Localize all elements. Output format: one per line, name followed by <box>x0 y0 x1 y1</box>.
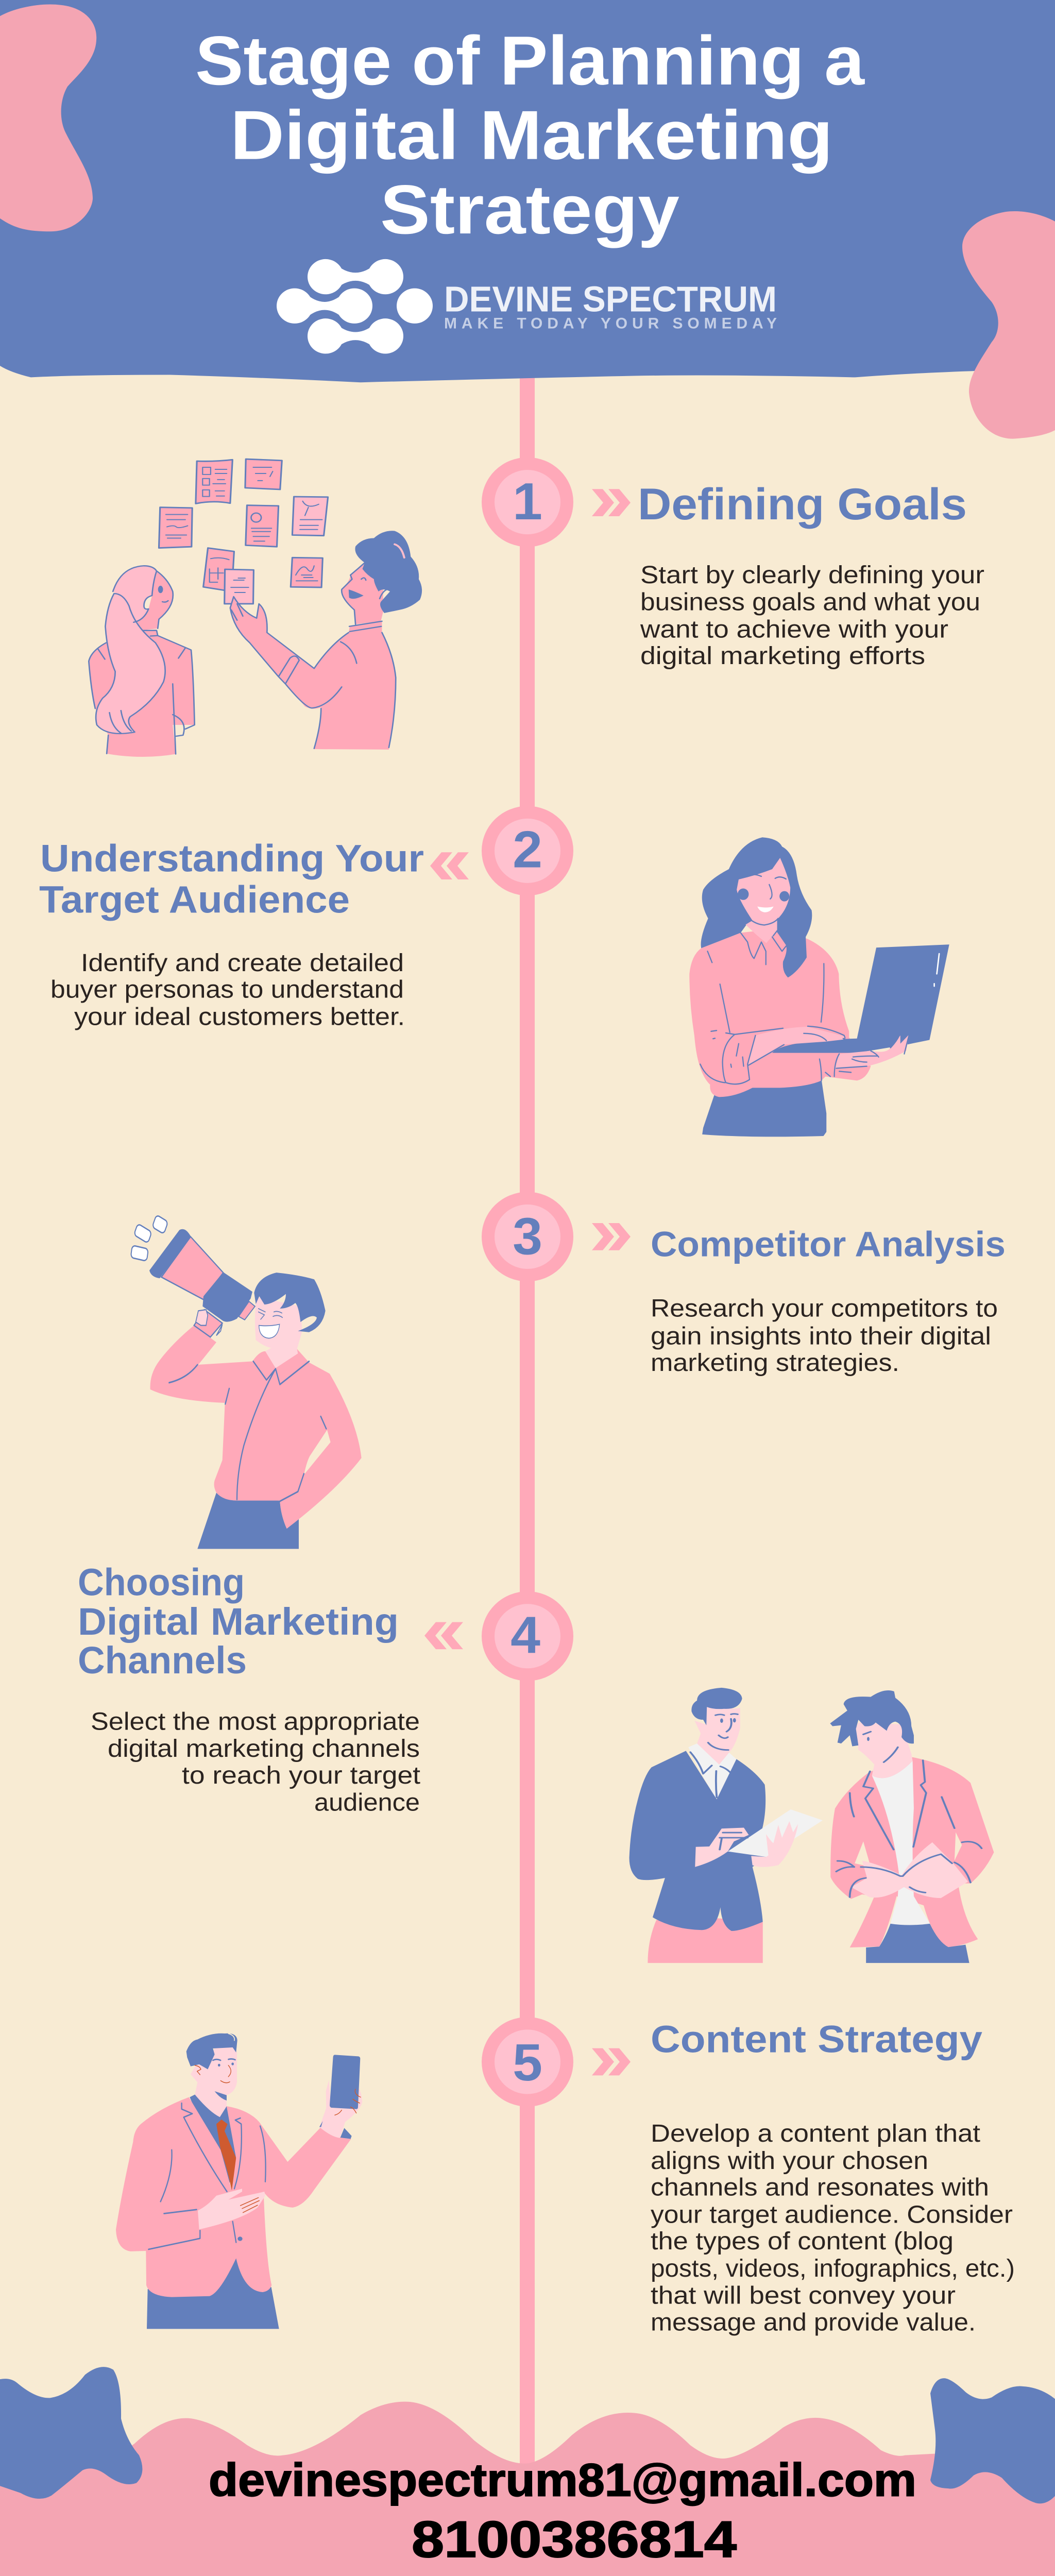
illustration: two colleagues talking <box>629 1688 994 1963</box>
hair <box>701 837 812 977</box>
face <box>737 858 790 923</box>
heading: Content Strategy <box>651 2018 982 2060</box>
number badge 1 <box>482 457 573 547</box>
body text: business goals and what you <box>640 588 980 616</box>
megaphone band <box>149 1229 191 1278</box>
header panel <box>0 0 1055 439</box>
logo mark: Devine Spectrum <box>277 259 433 354</box>
hands <box>748 1027 845 1065</box>
panel: step 2 understanding audience <box>39 806 949 1137</box>
shirt <box>190 2095 236 2188</box>
laughing mouth <box>259 1324 280 1338</box>
neck shadow <box>215 2091 227 2100</box>
megaphone body <box>202 1272 252 1322</box>
sticky notes <box>159 459 328 604</box>
illustration: man with megaphone <box>131 1215 362 1549</box>
sticky note scribbles <box>166 467 322 592</box>
hair <box>254 1273 326 1332</box>
left man head <box>694 1706 740 1766</box>
hair <box>186 2033 237 2070</box>
gap between torso and arm <box>304 1430 331 1475</box>
footer pink wave <box>0 2402 1055 2576</box>
man outlines and mouth <box>349 589 364 599</box>
illustration: man in blazer with phone <box>116 2033 362 2329</box>
right man t-shirt <box>872 1761 930 1925</box>
number badge 2: 2 <box>513 820 542 878</box>
sound bubbles <box>131 1215 168 1261</box>
arrow right <box>592 1223 631 1250</box>
number badge 2 <box>482 806 573 895</box>
eyes <box>218 2064 220 2066</box>
number badge 4: 4 <box>511 1605 540 1664</box>
writing hand <box>695 1827 748 1867</box>
lower hand <box>198 2189 265 2229</box>
arm gaps <box>855 1832 962 1867</box>
number badge 5: 5 <box>513 2033 542 2092</box>
decorative pink blob top left <box>0 5 96 231</box>
heading <box>39 837 424 921</box>
megaphone cone <box>161 1236 223 1299</box>
body text: Start by clearly defining your <box>640 561 984 589</box>
left man shirt <box>688 1743 737 1799</box>
man body <box>230 597 396 750</box>
body text: Research your competitors to <box>651 1295 998 1323</box>
woman outlines <box>89 566 195 754</box>
book and hands <box>851 1842 968 1898</box>
shirt <box>689 929 871 1097</box>
right man line details <box>836 1732 981 1897</box>
number badge 3: 3 <box>513 1207 542 1265</box>
phone <box>330 2055 360 2109</box>
right man trousers <box>866 1924 969 1963</box>
right man jacket <box>830 1757 994 1947</box>
trousers <box>147 2258 279 2329</box>
heading: Competitor Analysis <box>651 1224 1006 1264</box>
arrow right <box>592 489 631 516</box>
logo wordmark: MAKE TODAY YOUR SOMEDAY <box>444 315 777 332</box>
right blue blob <box>930 2378 1055 2503</box>
body text: your ideal customers better. <box>74 1003 405 1030</box>
right man eye and brow <box>733 1718 736 1722</box>
body text: aligns with your chosen <box>651 2147 928 2175</box>
left blue blob <box>0 2367 142 2499</box>
blazer line details <box>148 2059 266 2249</box>
fist <box>196 1310 223 1335</box>
heading: Defining Goals <box>638 480 967 529</box>
body text: marketing strategies. <box>651 1349 899 1377</box>
right man hair <box>830 1690 914 1747</box>
left man jacket <box>629 1751 769 1931</box>
tie <box>216 2120 236 2191</box>
woman body <box>89 630 195 757</box>
heading <box>78 1561 399 1682</box>
number badge 5 <box>482 2017 573 2107</box>
cheek right <box>779 891 789 902</box>
fingers on paper <box>766 1821 798 1856</box>
hair highlight <box>228 2033 234 2041</box>
number badge 3 <box>482 1192 573 1281</box>
body text: want to achieve with your <box>640 616 948 643</box>
left man skirt <box>648 1918 763 1963</box>
heading: Target Audience <box>39 878 350 921</box>
body text: Identify and create detailed <box>81 949 404 977</box>
body text: message and provide value. <box>651 2309 976 2336</box>
header blue wave background <box>0 0 1055 382</box>
title: Strategy <box>380 171 679 248</box>
cuff <box>319 2121 352 2139</box>
body text <box>651 2120 1015 2336</box>
megaphone rear <box>239 1301 255 1320</box>
body text: digital marketing efforts <box>640 642 925 670</box>
logo wordmark: DEVINE SPECTRUM <box>444 279 777 319</box>
number badge 1: 1 <box>513 472 542 531</box>
body text: digital marketing channels <box>108 1735 420 1762</box>
laptop <box>772 944 949 1053</box>
heading: Channels <box>78 1639 247 1682</box>
panel: step 1 defining goals <box>89 457 984 757</box>
body text: your target audience. Consider <box>651 2201 1013 2228</box>
skirt <box>702 1079 826 1137</box>
arrow left <box>430 852 469 879</box>
woman hair and head <box>132 571 173 631</box>
body text: Select the most appropriate <box>91 1708 420 1735</box>
phone hand <box>319 2080 362 2138</box>
left man line details <box>690 1714 747 1850</box>
body text <box>651 1295 998 1377</box>
heading: Choosing <box>78 1561 245 1603</box>
right hand holding paper <box>751 1821 798 1867</box>
shirt and arms <box>150 1326 362 1529</box>
number badge 4 <box>482 1591 573 1681</box>
man hair <box>355 531 422 613</box>
decorative pink blob top right <box>962 211 1055 439</box>
body text: buyer personas to understand <box>50 976 404 1003</box>
neck and face <box>191 2046 237 2117</box>
cheeks <box>738 888 748 900</box>
line details <box>700 874 909 1084</box>
trousers <box>197 1493 299 1549</box>
blazer <box>116 2097 351 2297</box>
laptop glare <box>934 954 939 986</box>
orange face and hand lines <box>195 2065 361 2213</box>
arrow right <box>592 2048 631 2075</box>
title <box>195 22 865 248</box>
paper <box>728 1809 823 1857</box>
button <box>237 2236 243 2241</box>
body text: Develop a content plan that <box>651 2120 981 2147</box>
title: Digital Marketing <box>230 96 833 174</box>
hand under laptop <box>835 1035 909 1069</box>
illustration: woman holding laptop <box>689 837 949 1137</box>
body text: channels and resonates with <box>651 2174 989 2201</box>
face and neck <box>255 1297 302 1368</box>
body text: posts, videos, infographics, etc.) <box>651 2255 1015 2282</box>
footer panel <box>0 2367 1055 2576</box>
body text <box>91 1708 421 1817</box>
title: Stage of Planning a <box>195 22 865 99</box>
body text: to reach your target <box>182 1761 421 1789</box>
body text: audience <box>314 1789 420 1817</box>
shirt line details <box>169 1361 326 1501</box>
panel: step 3 competitor analysis <box>131 1192 1006 1549</box>
handle <box>194 1310 223 1337</box>
body text <box>640 561 984 670</box>
vertical timeline line <box>520 362 535 2470</box>
arrow left <box>424 1622 463 1649</box>
squinting eyes <box>259 1309 282 1319</box>
contact email: devinespectrum81@gmail.com <box>209 2455 916 2506</box>
contact phone: 8100386814 <box>412 2511 737 2568</box>
smile <box>757 907 774 912</box>
panel: step 4 choosing channels <box>78 1561 994 1963</box>
right eye <box>231 2062 234 2065</box>
body text: the types of content (blog <box>651 2228 954 2255</box>
body text: that will best convey your <box>651 2282 956 2310</box>
neck and collar <box>745 919 777 943</box>
heading: Digital Marketing <box>78 1600 399 1643</box>
illustration: two people with sticky notes <box>89 459 422 757</box>
heading: Understanding Your <box>40 837 424 879</box>
body text <box>50 949 405 1030</box>
left man hair <box>691 1688 742 1725</box>
right man head <box>856 1722 913 1778</box>
body text: gain insights into their digital <box>651 1323 991 1350</box>
panel: step 5 content strategy <box>116 2017 1015 2336</box>
man head <box>342 563 383 624</box>
